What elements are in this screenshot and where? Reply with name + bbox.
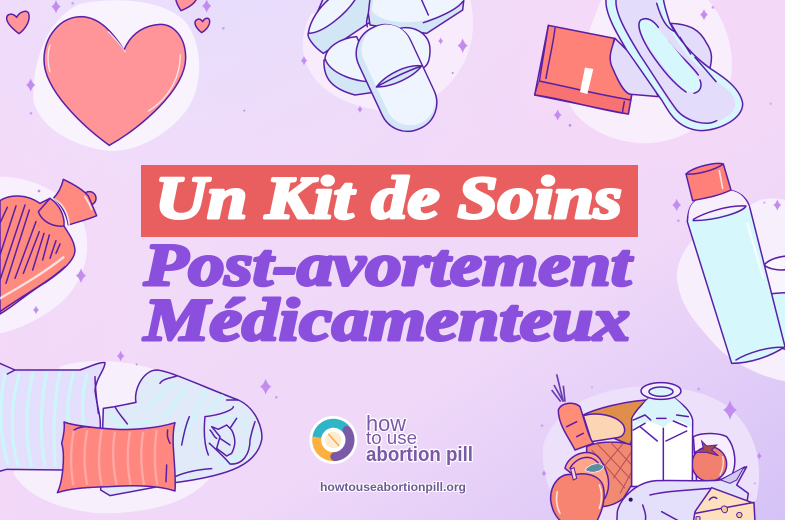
logo wordmark: how	[366, 411, 406, 436]
bread	[583, 400, 647, 445]
fish	[617, 467, 748, 520]
ribs	[0, 205, 60, 285]
wrapper	[535, 25, 632, 114]
bottle body	[687, 191, 785, 363]
title line 3: Médicamenteux	[143, 287, 630, 353]
website url: howtouseabortionpill.org	[320, 482, 466, 494]
upper right tablet	[367, 0, 464, 33]
logo wordmark	[366, 411, 473, 466]
cornucopia	[565, 442, 632, 507]
glass	[764, 256, 785, 350]
upper left tablet	[308, 0, 373, 53]
icon: water bottle and glass	[672, 163, 785, 382]
icon: groceries	[541, 374, 762, 520]
milk carton	[632, 383, 693, 487]
icon: pillows and blanket	[0, 351, 278, 513]
front pillow	[57, 422, 175, 493]
logo mark	[309, 416, 357, 464]
tomato	[692, 441, 727, 481]
title line 2: Post-avortement	[143, 232, 634, 298]
logo wordmark: to use	[366, 428, 417, 448]
apple	[551, 464, 604, 520]
back pillow	[0, 363, 105, 472]
icon: sanitary pad and wrapper	[535, 0, 772, 143]
carrot	[558, 403, 593, 450]
icon: hot water bottle	[0, 177, 97, 333]
carrot leaves	[552, 374, 565, 402]
icon: hearts	[7, 0, 245, 151]
icon: pills	[301, 0, 473, 141]
lower left tablet	[324, 37, 390, 95]
cap	[686, 163, 731, 201]
egg	[693, 434, 735, 482]
blanket	[101, 370, 262, 496]
logo wordmark: abortion pill	[366, 444, 473, 466]
capsule tablet	[347, 15, 446, 141]
title banner	[141, 165, 638, 237]
title line 1: Un Kit de Soins	[155, 165, 622, 231]
cheese	[693, 488, 755, 520]
